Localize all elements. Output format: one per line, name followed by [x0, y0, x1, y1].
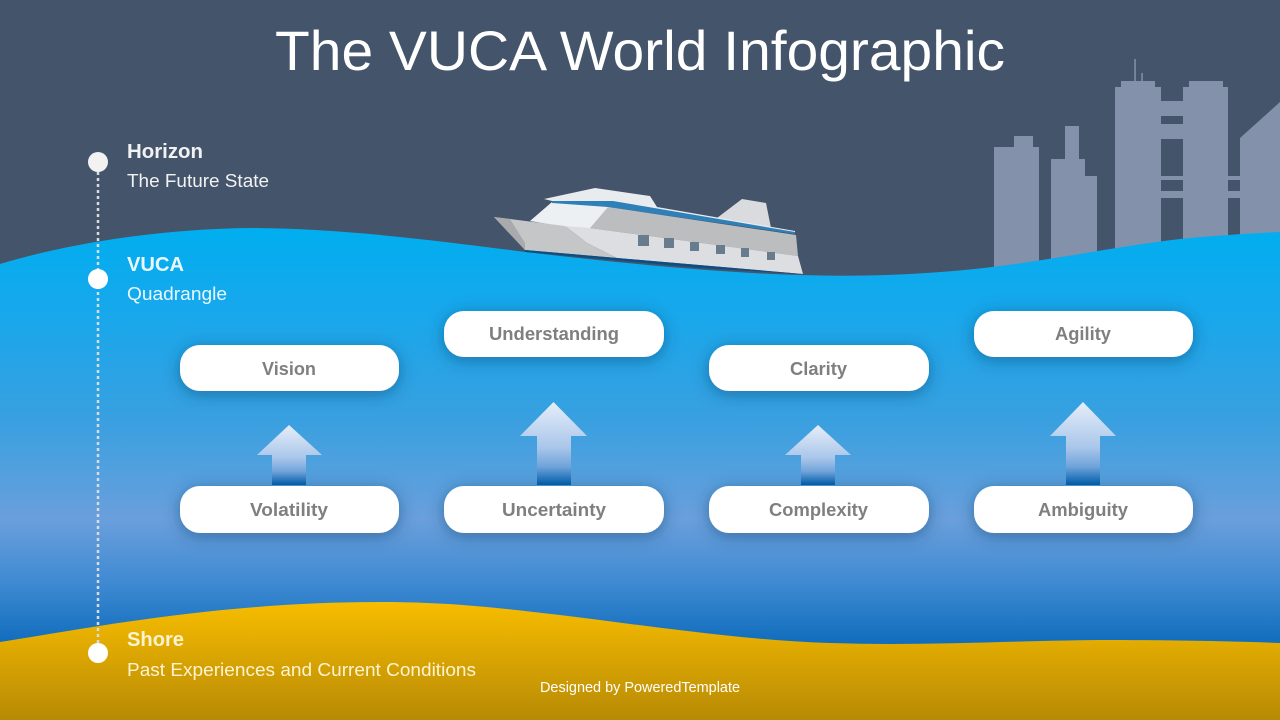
- pill: Complexity: [709, 486, 929, 533]
- pill: Agility: [974, 311, 1193, 357]
- pill: Vision: [180, 345, 399, 391]
- label: Shore: [127, 629, 476, 680]
- arrow: Uncertainty to Understanding: [520, 402, 587, 485]
- ship stripe: [552, 201, 795, 234]
- pill: Complexity: Complexity: [769, 499, 869, 520]
- timeline dotted line: [97, 172, 99, 643]
- label: Horizon: The Future State: [127, 170, 269, 191]
- pill: Uncertainty: Uncertainty: [502, 499, 607, 520]
- label: VUCA: [127, 254, 227, 304]
- pill: Understanding: Understanding: [489, 323, 619, 344]
- pill: Ambiguity: Ambiguity: [1038, 499, 1129, 520]
- illustration: water: [0, 228, 1280, 660]
- label: Shore: Past Experiences and Current Conditions: [127, 659, 476, 680]
- ship funnel: [717, 199, 771, 228]
- ship roof: [544, 188, 795, 233]
- ship bow shade: [494, 217, 525, 250]
- illustration: sandy shore: [0, 602, 1280, 720]
- pill: Vision: Vision: [262, 358, 316, 379]
- label: Horizon: Horizon: [127, 141, 203, 163]
- illustration: city skyline: [994, 59, 1280, 275]
- illustration: cruise ship: [494, 188, 803, 274]
- ship waterline: [525, 250, 803, 274]
- pill: Ambiguity: [974, 486, 1193, 533]
- label: VUCA: Quadrangle: [127, 283, 227, 304]
- label: Shore: Shore: [127, 629, 184, 651]
- pill: Agility: Agility: [1055, 323, 1112, 344]
- ship upper deck: [530, 202, 610, 229]
- timeline: [88, 152, 108, 663]
- pill: Volatility: [180, 486, 399, 533]
- timeline dot: VUCA: [88, 269, 108, 289]
- ship hull: [565, 226, 803, 274]
- label: Horizon: [127, 141, 269, 191]
- ship windows: [638, 235, 775, 260]
- arrow: Complexity to Clarity: [785, 425, 851, 485]
- arrow: Volatility to Vision: [257, 425, 322, 485]
- pill: Volatility: Volatility: [250, 499, 329, 520]
- timeline dot: horizon: [88, 152, 108, 172]
- footer credit: Designed by PoweredTemplate: [540, 680, 740, 696]
- arrow: Ambiguity to Agility: [1050, 402, 1116, 485]
- pill: Uncertainty: [444, 486, 664, 533]
- label: VUCA: VUCA: [127, 254, 184, 276]
- ship grey band: [590, 207, 798, 256]
- pill: Understanding: [444, 311, 664, 357]
- pill: Clarity: Clarity: [790, 358, 848, 379]
- title: The VUCA World Infographic: [275, 19, 1005, 82]
- pill: Clarity: [709, 345, 929, 391]
- timeline dot: shore: [88, 643, 108, 663]
- ship bow: [494, 217, 617, 258]
